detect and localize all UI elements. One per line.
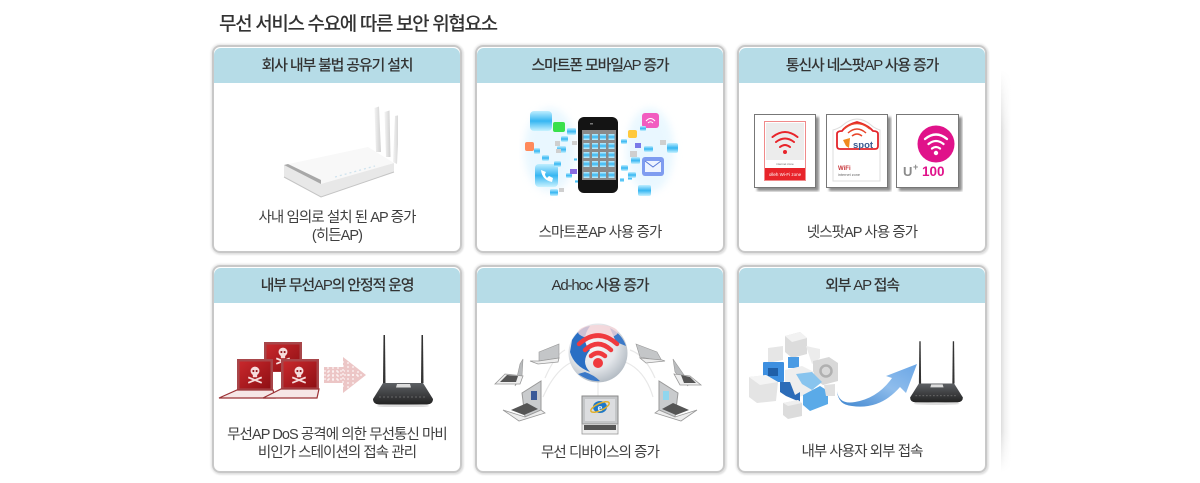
caption: 무선AP DoS 공격에 의한 무선통신 마비 [227,427,447,443]
icon: U+ 100 sign [896,114,963,192]
caption [258,210,416,244]
panel heading [739,48,985,83]
panel heading: 회사 내부 불법 공유기 설치 [262,57,412,74]
connection lines [543,350,655,397]
icon: T spot sign: spot [853,140,874,151]
panel heading [477,268,723,303]
icon: smartphone with app icons [522,107,678,196]
caption: 넷스팟AP 사용 증가 [807,225,917,241]
arrow: outward connection [837,364,917,407]
panel: 외부 AP 접속 [737,265,987,473]
panel: 회사 내부 불법 공유기 설치 [212,45,462,253]
caption [227,426,447,461]
title: 무선 서비스 수요에 따른 보안 위협요소 [219,14,497,35]
caption: 내부 사용자 외부 접속 [801,444,923,460]
icon: olleh Wi-Fi sign: internet zone [776,162,794,166]
arrow: attack direction [324,357,366,393]
caption: 사내 임의로 설치 된 AP 증가 [258,210,415,226]
panel heading [739,268,985,303]
laptops [582,396,618,434]
icon: cube cluster [749,332,838,419]
caption: 무선 디바이스의 증가 [541,445,659,461]
icon: T spot sign: internet zone [838,173,860,177]
panel: Ad-hoc 사용 증가 [475,265,725,473]
phone [578,117,618,193]
panel heading: 통신사 네스팟AP 사용 증가 [786,57,938,74]
globe [568,324,628,382]
icon: olleh Wi-Fi sign: olleh Wi-Fi zone [769,172,802,177]
icon: globe with wifi and laptops [494,324,702,434]
caption: 스마트폰AP 사용 증가 [539,225,661,241]
panel heading: 스마트폰 모바일AP 증가 [532,57,668,74]
icon: T spot sign: WiFi [838,166,851,172]
icon: olleh Wi-Fi sign [754,114,820,192]
right edge shadow [1001,86,1008,462]
small app icons [534,126,678,196]
icon: black wireless AP [373,335,433,407]
panel heading [214,48,460,83]
panel: 통신사 네스팟AP 사용 증가 [737,45,987,253]
icon: T spot sign [826,114,892,192]
panel heading: 내부 무선AP의 안정적 운영 [261,277,413,294]
caption: 비인가 스테이션의 접속 관리 [258,445,416,461]
panel heading [477,48,723,83]
panel: 내부 무선AP의 안정적 운영 [212,265,462,473]
icon: U+ 100 sign: + [913,162,918,172]
icon: white router [284,106,398,198]
panel heading [214,268,460,303]
panel: 스마트폰 모바일AP 증가 [475,45,725,253]
icon: U+ 100 sign: U [903,164,912,179]
caption: (히든AP) [312,228,362,244]
icon: black wireless AP [910,341,963,405]
panel heading: Ad-hoc 사용 증가 [552,277,648,294]
icon: U+ 100 sign: 100 [922,164,945,179]
large app icons [530,111,552,131]
panel heading: 외부 AP 접속 [825,277,899,294]
icon: infected red laptops [218,342,320,399]
laptops: e [598,402,603,414]
